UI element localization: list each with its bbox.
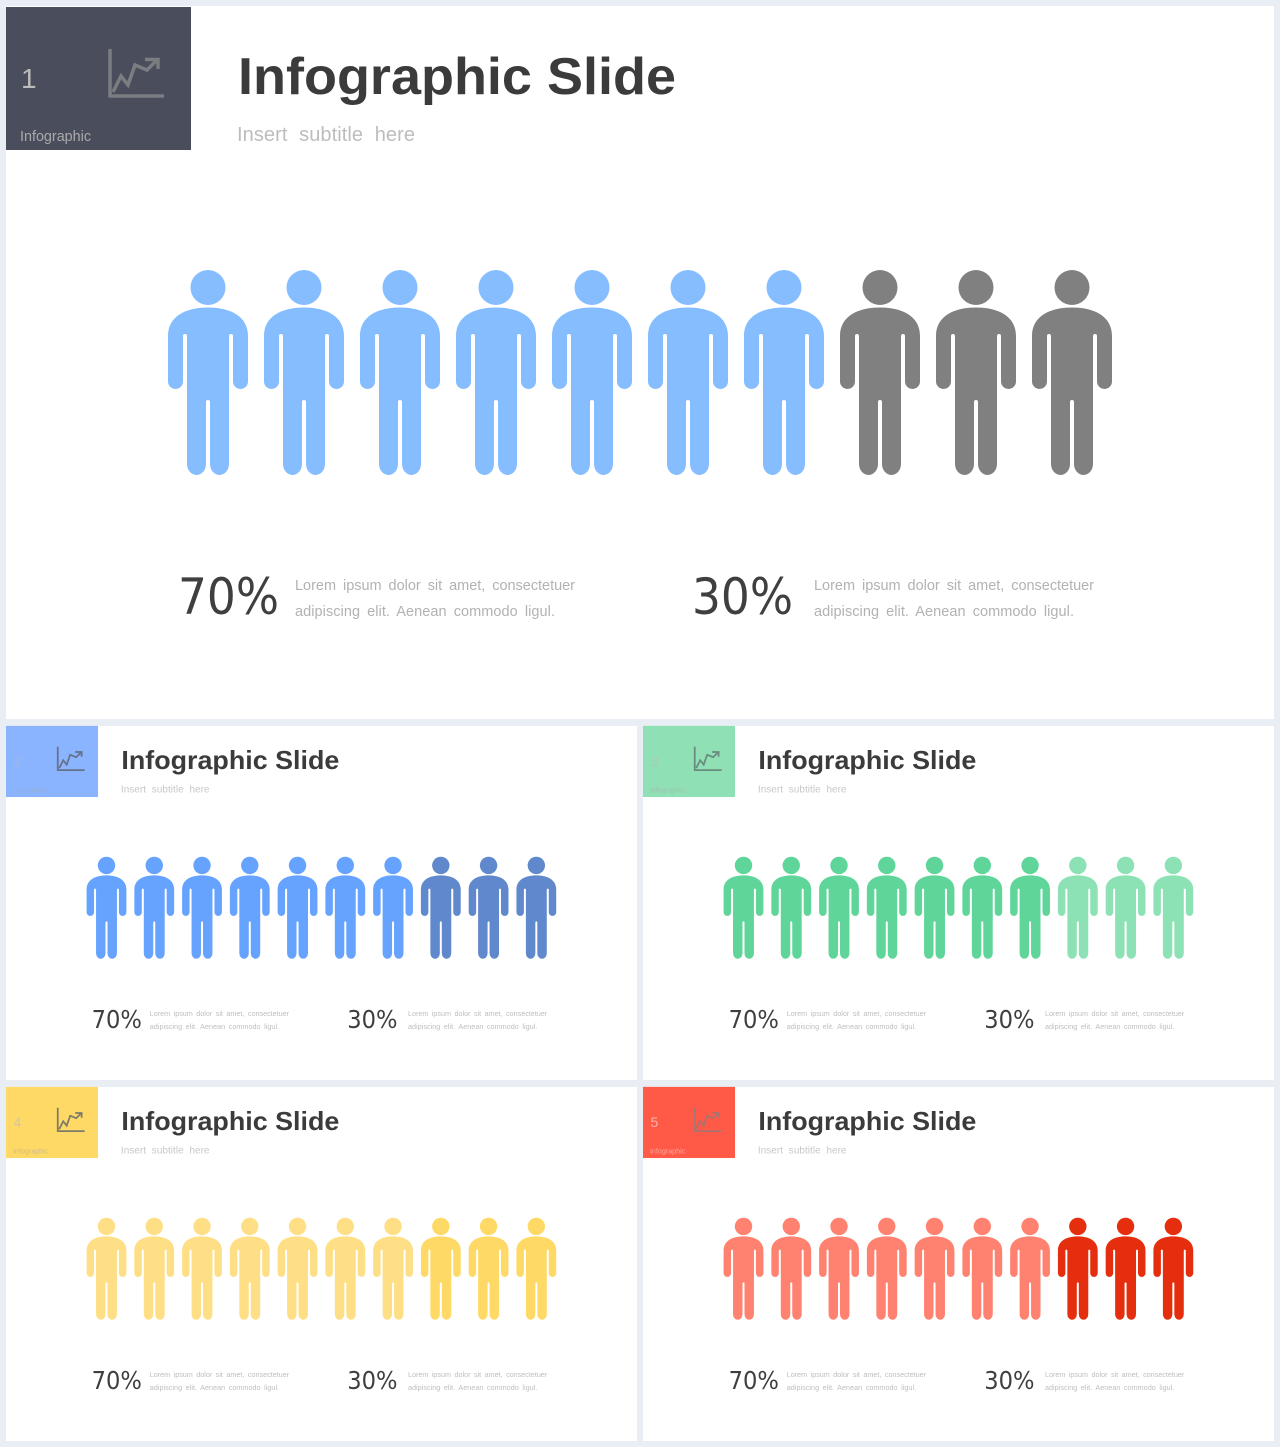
people row	[724, 857, 1193, 959]
stat: 70%: 70%	[178, 568, 279, 626]
header badge: 5	[650, 1114, 658, 1130]
title: Infographic Slide	[238, 48, 676, 106]
subtitle: Insert subtitle here	[758, 1146, 847, 1157]
stat: 30%: adipiscing elit. Aenean commodo ligul.	[1045, 1022, 1174, 1031]
header badge	[643, 726, 735, 797]
subtitle: Insert subtitle here	[237, 124, 415, 146]
stat: 30%: 30%	[984, 1366, 1035, 1395]
stat: 70%	[92, 1005, 290, 1034]
stat: 70%: adipiscing elit. Aenean commodo ligul.	[787, 1383, 916, 1392]
header badge: 1	[21, 63, 37, 94]
people row: 7 blue, 3 grey	[168, 270, 1112, 475]
title: Infographic Slide	[121, 747, 339, 775]
stat: 70%: 70%	[729, 1366, 779, 1395]
header badge	[6, 7, 191, 150]
subtitle: Insert subtitle here	[121, 785, 210, 796]
panel: yellow slide 4	[6, 1087, 637, 1441]
stat: 70%	[729, 1005, 927, 1034]
stat: 70%	[92, 1366, 290, 1395]
stat: 30%: 30%	[692, 568, 793, 626]
stat: 30%: adipiscing elit. Aenean commodo ligul.	[1045, 1383, 1174, 1392]
stat: 30%	[692, 568, 1094, 626]
subtitle: Insert subtitle here	[758, 785, 847, 796]
stat: 30%: Lorem ipsum dolor sit amet, consectetuer	[408, 1009, 548, 1018]
people row	[87, 857, 556, 959]
panel: green slide 3	[643, 726, 1274, 1080]
panel: red slide 5	[643, 1087, 1274, 1441]
stat: 30%: Lorem ipsum dolor sit amet, consectetuer	[1045, 1370, 1185, 1379]
stat: 30%: Lorem ipsum dolor sit amet, consectetuer	[814, 578, 1094, 594]
stat: 30%: 30%	[984, 1005, 1035, 1034]
stat: 70%	[178, 568, 575, 626]
header badge: 2	[13, 753, 21, 769]
stat: 70%: Lorem ipsum dolor sit amet, consectetuer	[150, 1009, 290, 1018]
people row	[724, 1218, 1193, 1320]
stat: 30%: adipiscing elit. Aenean commodo ligul.	[408, 1022, 537, 1031]
stat: 70%: 70%	[92, 1005, 142, 1034]
header badge: Infographic	[13, 1147, 49, 1156]
header badge: 4	[13, 1114, 21, 1130]
header badge: Infographic	[20, 128, 91, 145]
stat: 30%	[984, 1005, 1185, 1034]
header badge: 3	[650, 753, 658, 769]
stat: 30%: adipiscing elit. Aenean commodo ligul.	[814, 604, 1074, 620]
stat: 70%: adipiscing elit. Aenean commodo ligul.	[295, 604, 555, 620]
stat: 70%: Lorem ipsum dolor sit amet, consectetuer	[787, 1009, 927, 1018]
title: Infographic Slide	[121, 1108, 339, 1136]
stat: 30%: 30%	[347, 1366, 398, 1395]
header badge: Infographic	[13, 786, 49, 795]
panel: main slide 1	[6, 6, 1274, 719]
stat: 30%: 30%	[347, 1005, 398, 1034]
stat: 70%: Lorem ipsum dolor sit amet, consectetuer	[150, 1370, 290, 1379]
stat: 30%	[347, 1005, 548, 1034]
header badge	[6, 726, 98, 797]
stat: 70%: 70%	[92, 1366, 142, 1395]
panel: blue slide 2	[6, 726, 637, 1080]
stat: 70%: Lorem ipsum dolor sit amet, consectetuer	[295, 578, 575, 594]
people row	[87, 1218, 556, 1320]
stat: 30%: Lorem ipsum dolor sit amet, consectetuer	[1045, 1009, 1185, 1018]
stat: 70%: adipiscing elit. Aenean commodo ligul.	[787, 1022, 916, 1031]
header badge	[643, 1087, 735, 1158]
header badge: Infographic	[650, 1147, 686, 1156]
stat: 70%	[729, 1366, 927, 1395]
header badge	[6, 1087, 98, 1158]
title: Infographic Slide	[758, 1108, 976, 1136]
stat: 30%: Lorem ipsum dolor sit amet, consectetuer	[408, 1370, 548, 1379]
stat: 30%: adipiscing elit. Aenean commodo ligul.	[408, 1383, 537, 1392]
stat: 70%: Lorem ipsum dolor sit amet, consectetuer	[787, 1370, 927, 1379]
title: Infographic Slide	[758, 747, 976, 775]
stat: 30%	[984, 1366, 1185, 1395]
stat: 70%: 70%	[729, 1005, 779, 1034]
stat: 70%: adipiscing elit. Aenean commodo ligul.	[150, 1383, 279, 1392]
subtitle: Insert subtitle here	[121, 1146, 210, 1157]
stat: 70%: adipiscing elit. Aenean commodo ligul.	[150, 1022, 279, 1031]
header badge: Infographic	[650, 786, 686, 795]
stat: 30%	[347, 1366, 548, 1395]
